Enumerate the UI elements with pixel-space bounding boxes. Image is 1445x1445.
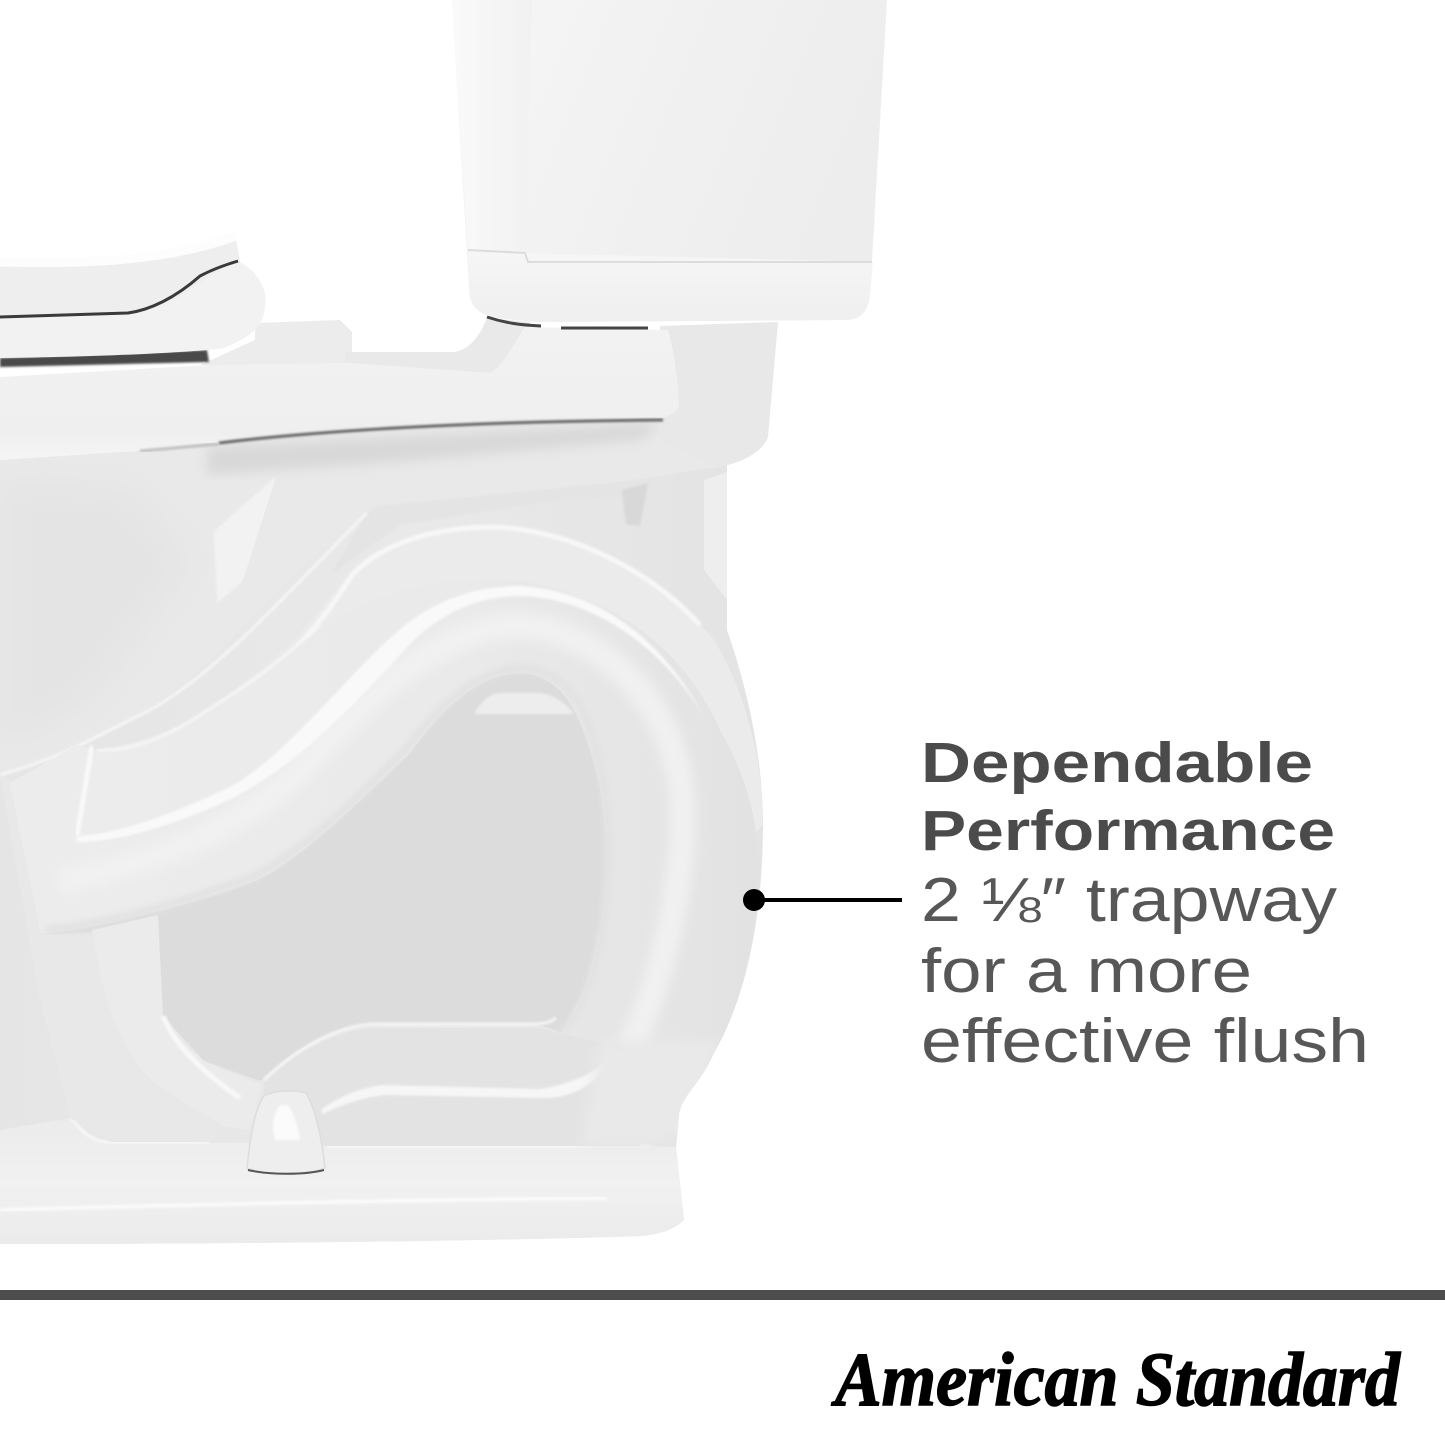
lower pipe	[92, 915, 162, 995]
bowl shade	[0, 480, 190, 750]
tank	[452, 0, 887, 322]
tube underside shade	[53, 886, 227, 930]
description	[921, 866, 1369, 1076]
base lip light	[0, 1198, 607, 1210]
pipe highlight	[163, 1016, 240, 1098]
tank left facet	[452, 0, 532, 253]
ledge recess	[330, 482, 624, 575]
recess panel	[41, 673, 607, 1081]
tube highlight crescent	[76, 586, 709, 842]
tank lower band	[468, 250, 873, 322]
tube tip edge	[77, 746, 92, 836]
rim underside shadow	[219, 420, 663, 443]
upper tube line	[98, 641, 302, 750]
seat lid top	[0, 233, 240, 317]
heading: Dependable	[921, 731, 1313, 795]
bowl reflection	[216, 482, 274, 599]
channel band	[322, 1144, 640, 1146]
tank gasket	[487, 317, 648, 328]
description: for a more	[921, 937, 1252, 1006]
tube bright centre	[497, 621, 694, 1038]
lower left strip	[72, 1118, 208, 1142]
callout pointer	[743, 889, 902, 911]
seat lid white edge	[0, 236, 236, 263]
ledge shadow	[207, 422, 663, 475]
bowl edge over ridge	[0, 513, 367, 775]
right light strip	[704, 472, 727, 600]
description: effective flush	[921, 1007, 1369, 1076]
upper ledge band	[244, 488, 274, 577]
description: 2 ⅛″ trapway	[921, 866, 1337, 935]
logo: American Standard: American Standard	[831, 1338, 1401, 1422]
rim left shadow	[140, 444, 219, 451]
seat hinge	[200, 320, 352, 365]
lower white band	[322, 1072, 595, 1114]
right tube lower blend	[596, 1063, 606, 1076]
rim	[0, 327, 679, 460]
base foot	[0, 1141, 684, 1225]
tank neck	[660, 322, 778, 467]
callout text	[921, 731, 1369, 1076]
outer ridge band	[90, 527, 763, 900]
vertical fin	[622, 483, 648, 526]
base flange line	[71, 1119, 572, 1146]
seat	[0, 233, 266, 358]
tank band lines	[468, 250, 872, 262]
toilet body	[0, 410, 763, 1244]
body details clipped to silhouette	[0, 415, 763, 1250]
heading	[921, 731, 1335, 863]
base flange line right	[327, 1144, 650, 1148]
deck	[345, 318, 530, 373]
heading: Performance	[921, 799, 1335, 863]
floor bolt cap	[247, 1091, 325, 1174]
recess top light	[474, 693, 574, 714]
seat gap line	[0, 261, 238, 317]
footer divider	[0, 1290, 1445, 1300]
trapway tube	[164, 645, 756, 893]
illustration: toilet close-up	[0, 0, 887, 1250]
seat dark gap	[0, 350, 209, 367]
bowl	[0, 446, 367, 775]
ridge highlight	[310, 524, 701, 630]
channel line	[264, 1018, 556, 1080]
